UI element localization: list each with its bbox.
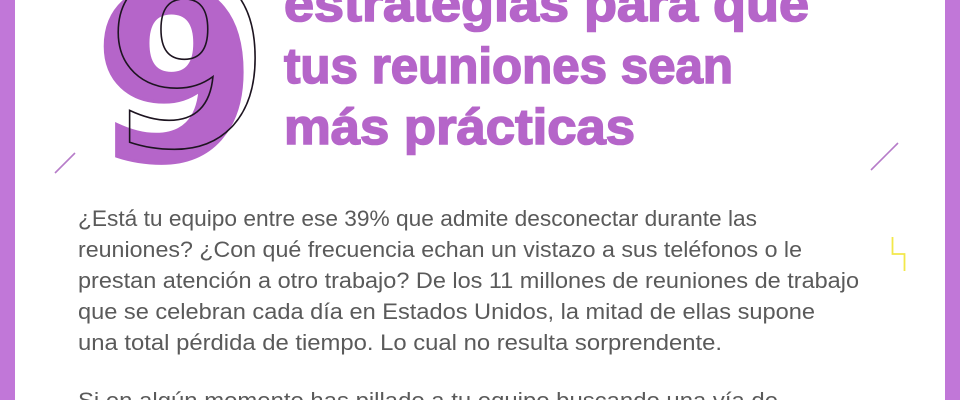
title (284, 0, 809, 155)
yellow zigzag (892, 237, 904, 271)
right border band (945, 0, 960, 400)
intro paragraph (78, 206, 859, 355)
intro paragraph: una total pérdida de tiempo. Lo cual no resulta sorprendente. (78, 330, 722, 355)
title: más prácticas (284, 99, 635, 155)
decorative slash right (871, 143, 898, 170)
left border band (0, 0, 15, 400)
intro paragraph: prestan atención a otro trabajo? De los 11 millones de reuniones de trabajo (78, 268, 859, 293)
intro paragraph: que se celebran cada día en Estados Unidos, la mitad de ellas supone (78, 299, 815, 324)
decorative slash left (55, 153, 75, 173)
title: tus reuniones sean (284, 38, 733, 94)
intro paragraph: ¿Está tu equipo entre ese 39% que admite desconectar durante las (78, 206, 757, 231)
intro paragraph: reuniones? ¿Con qué frecuencia echan un vistazo a sus teléfonos o le (78, 237, 802, 262)
